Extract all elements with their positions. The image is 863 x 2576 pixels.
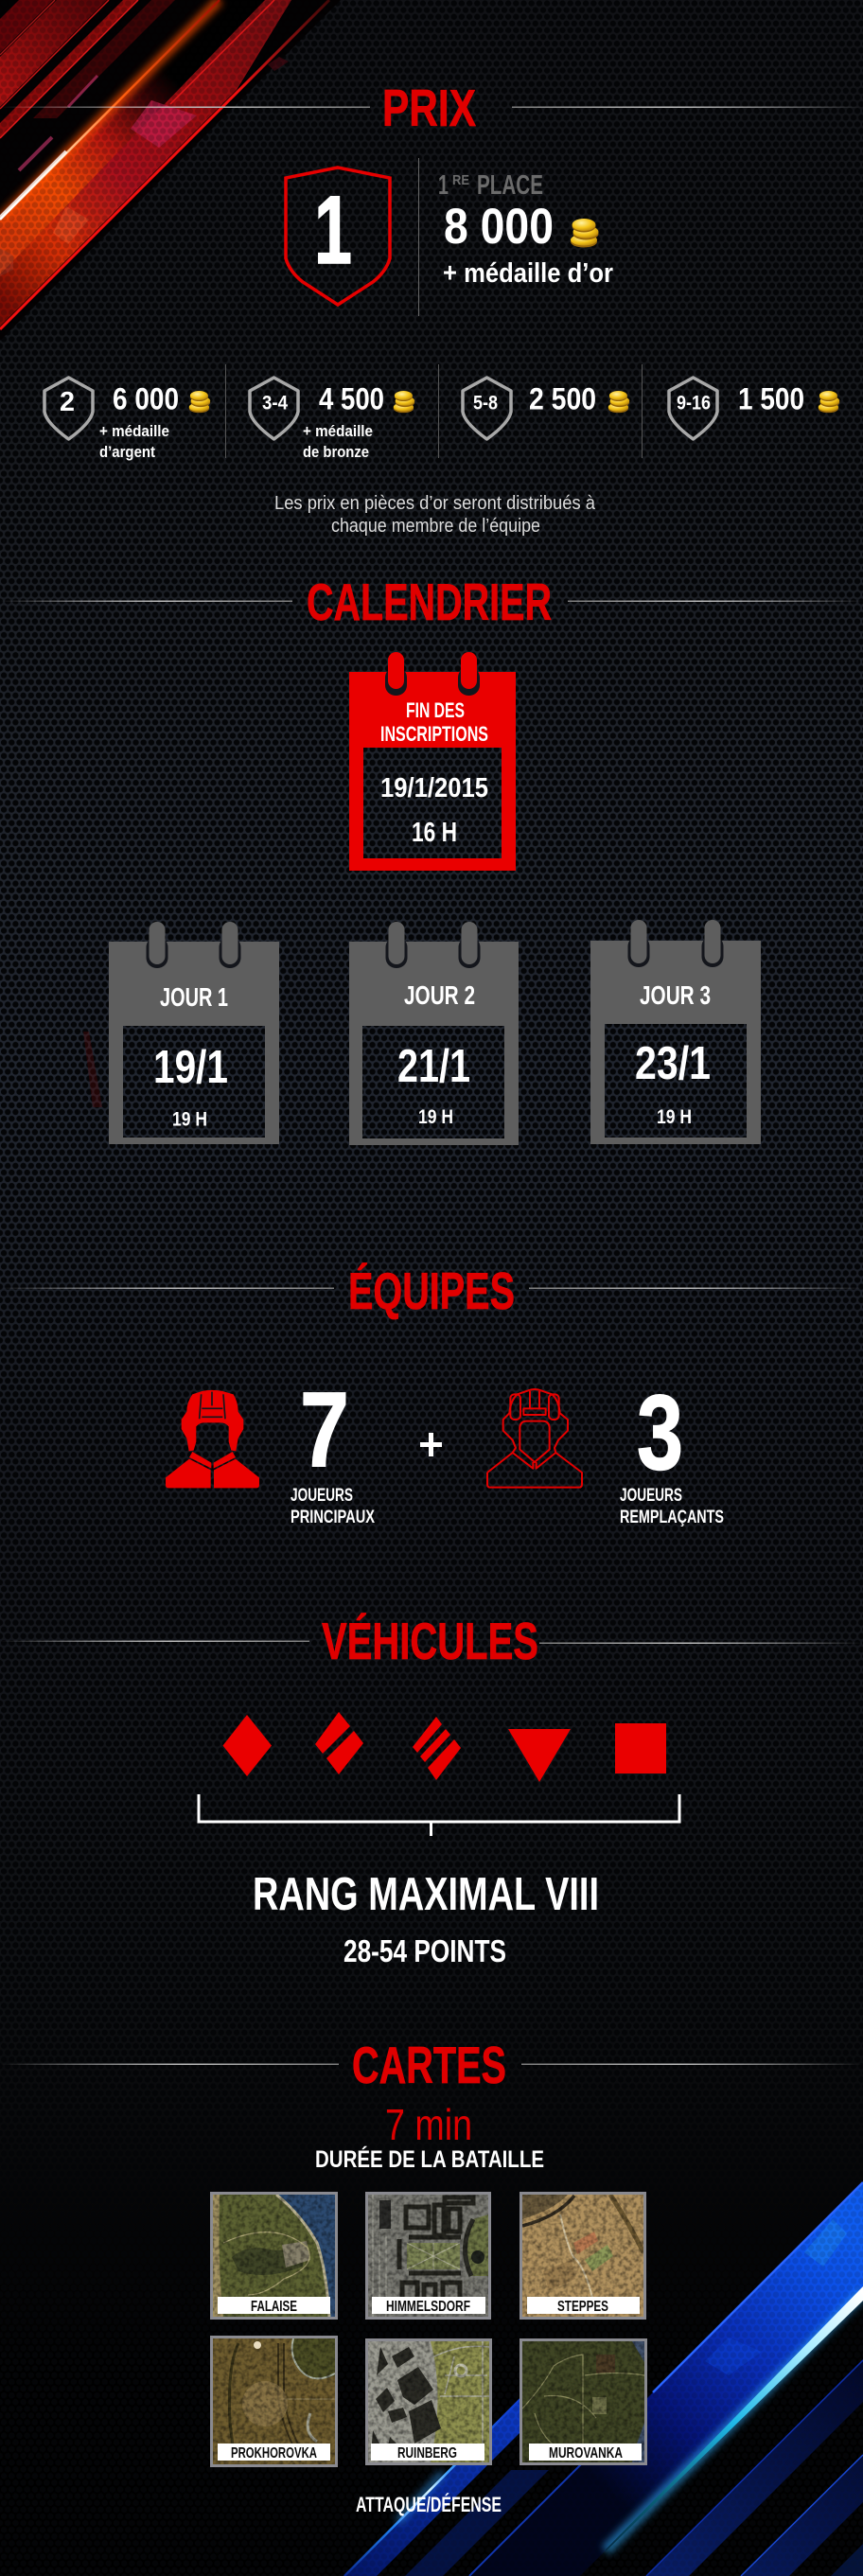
label: joueurs principaux: PRINCIPAUX [291, 1508, 375, 1527]
icon: gold coins large [571, 219, 598, 248]
map: murovanka [520, 2339, 645, 2464]
bracket [199, 1794, 679, 1836]
calendar: jour 3: 23/1 [635, 1038, 711, 1089]
faint red smudge [83, 1032, 102, 1107]
prize: rank 2 [44, 378, 210, 461]
icon: main player helmet [166, 1390, 259, 1488]
prize: rank 9-16 [669, 378, 839, 439]
map: falaise [212, 2194, 337, 2319]
calendar: jour 1: 19/1 [153, 1042, 228, 1093]
first place text [438, 170, 613, 289]
prize: rank 3-4: de bronze [303, 443, 369, 461]
text: attack defense mode: ATTAQUE/DÉFENSE [356, 2493, 502, 2516]
calendar: jour 3: 19 H [657, 1106, 692, 1128]
first place text: 1 [438, 170, 449, 201]
plus sign [420, 1433, 442, 1456]
calendar: registration deadline: FIN DES [406, 698, 465, 722]
label: joueurs remplaçants: REMPLAÇANTS [620, 1508, 724, 1527]
prize: rank 3-4 [250, 378, 414, 461]
first place text: 8 000 [444, 199, 554, 255]
heading: cartes: CARTES [352, 2036, 506, 2094]
icon: light tank [223, 1715, 272, 1776]
prize: rank 9-16: 1 500 [738, 382, 804, 416]
prize: rank 5-8: 2 500 [529, 382, 596, 416]
label: joueurs principaux: JOUEURS [291, 1486, 353, 1506]
heading: véhicules: VÉHICULES [322, 1612, 538, 1670]
prize: rank 2: 6 000 [113, 382, 179, 416]
heading: prix: PRIX [382, 79, 476, 137]
text: points: 28-54 POINTS [343, 1933, 506, 1968]
icon: heavy tank [413, 1717, 461, 1780]
first place text: + médaille d’or [443, 258, 613, 289]
prize: rank 9-16: 9-16 [677, 392, 711, 415]
first place text: PLACE [477, 170, 543, 201]
calendar: registration deadline: INSCRIPTIONS [380, 722, 488, 746]
prize: rank 3-4: 4 500 [319, 382, 384, 416]
panel: équipes [0, 1262, 863, 1527]
calendar: registration deadline: 16 H [412, 818, 457, 848]
map: himmelsdorf [367, 2194, 490, 2319]
heading: calendrier: CALENDRIER [307, 573, 552, 631]
prize: rank 5-8: 5-8 [473, 392, 498, 415]
first place shield [286, 168, 390, 305]
prize: rank 2: + médaille [99, 422, 169, 440]
panel: prix [0, 79, 863, 537]
calendar: jour 2 [349, 922, 519, 1145]
calendar: registration deadline: 19/1/2015 [380, 773, 488, 803]
text: battle duration label: DURÉE DE LA BATAILLE [315, 2145, 544, 2173]
calendar: jour 1 [109, 922, 279, 1144]
calendar: jour 1: JOUR 1 [160, 982, 228, 1012]
map: ruinberg: RUINBERG [397, 2445, 457, 2461]
note: prize distribution: chaque membre de l’équipe [331, 516, 540, 537]
icon: artillery [615, 1723, 666, 1773]
first place text: RE [452, 172, 469, 188]
prize: rank 2: 2 [60, 387, 75, 417]
note: prize distribution: Les prix en pièces d’or seront distribués à [274, 493, 596, 514]
calendar: jour 1: 19 H [172, 1109, 207, 1130]
map: falaise: FALAISE [251, 2299, 297, 2315]
calendar: registration deadline [349, 652, 516, 871]
text: rang maximal: RANG MAXIMAL VIII [253, 1869, 599, 1920]
map: murovanka: MUROVANKA [549, 2445, 623, 2461]
panel: véhicules [0, 1612, 863, 1968]
number: 7: 7 [300, 1370, 349, 1489]
panel: calendrier [0, 573, 863, 1145]
label: joueurs remplaçants: JOUEURS [620, 1486, 682, 1506]
icon: tank destroyer [508, 1729, 571, 1782]
heading: équipes: ÉQUIPES [348, 1262, 515, 1320]
text: battle duration value: 7 min [385, 2100, 472, 2149]
decoration: blue light streaks [341, 2177, 863, 2576]
icon: reserve player helmet [487, 1389, 582, 1488]
calendar: jour 3: JOUR 3 [640, 980, 711, 1010]
icon: medium tank [315, 1712, 363, 1774]
calendar: jour 3 [590, 920, 761, 1144]
map: prokhorovka [212, 2338, 337, 2466]
prize: rank 2: d’argent [99, 443, 155, 461]
calendar: jour 2: 21/1 [397, 1041, 470, 1092]
prize: rank 3-4: + médaille [303, 422, 373, 440]
decoration: red light streaks [0, 0, 341, 341]
map: himmelsdorf: HIMMELSDORF [386, 2299, 470, 2315]
map: ruinberg [367, 2339, 490, 2464]
map: steppes: STEPPES [557, 2299, 608, 2315]
label: joueurs principaux [291, 1486, 375, 1527]
first place shield: 1 [314, 176, 352, 284]
prize: rank 5-8 [463, 378, 629, 439]
map: prokhorovka: PROKHOROVKA [231, 2445, 317, 2461]
calendar: jour 2: JOUR 2 [404, 980, 475, 1010]
prize: rank 3-4: 3-4 [262, 392, 288, 415]
panel: cartes [0, 2036, 863, 2516]
note: prize distribution [274, 493, 596, 537]
label: joueurs remplaçants [620, 1486, 724, 1527]
map: steppes [520, 2194, 645, 2319]
calendar: jour 2: 19 H [418, 1106, 453, 1128]
number: 3: 3 [637, 1373, 683, 1491]
